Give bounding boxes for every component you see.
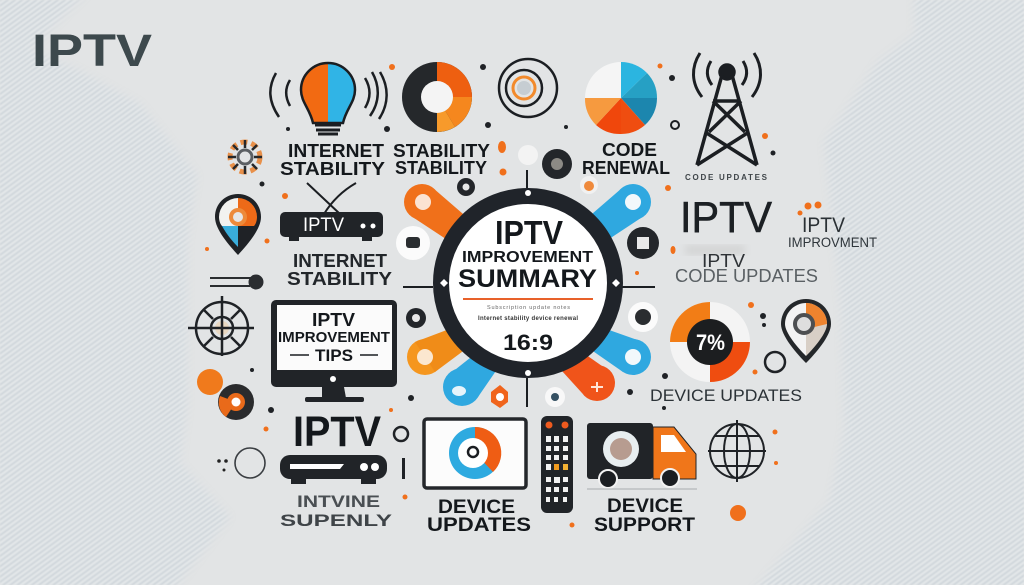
icon: delivery truck [587, 423, 697, 489]
icon: broadcast tower [693, 53, 761, 165]
icon: settings gear [228, 140, 262, 174]
text: code updates blurred: IPTV [702, 251, 745, 271]
text: device updates right: DEVICE UPDATES [650, 386, 802, 405]
logo: IPTV: IPTV [32, 25, 152, 76]
text: internet stability lower: INTERNET [293, 251, 387, 271]
text: code renewal: CODE [602, 140, 657, 160]
icon: small hexagon [394, 427, 408, 441]
icon: monitor with tips [271, 300, 397, 402]
text: stability stability: STABILITY [395, 158, 487, 178]
badges around the hub [396, 145, 659, 408]
text: blurred caption under tower: CODE UPDATES [685, 173, 768, 182]
paddle: red-orange lower right [552, 345, 615, 401]
hub: central summary circle: IMPROVEMENT [462, 249, 593, 266]
hub: central summary circle: SUMMARY [458, 265, 597, 293]
chart: colour pie [585, 62, 657, 134]
orange accents [205, 64, 822, 528]
icon: thin circle [217, 448, 265, 478]
icon: target rings [499, 59, 557, 117]
paddle: blue top right [585, 184, 651, 245]
text: device support: SUPPORT [594, 515, 695, 536]
text: code updates blurred: CODE UPDATES [675, 266, 818, 286]
chart: dark orange donut [402, 62, 472, 132]
icon: IPTV router [280, 212, 383, 241]
icon: monitor with tips: IPTV [312, 310, 355, 330]
text: garbled caption: SUPENLY [280, 511, 393, 530]
text: IPTV improvment [788, 214, 877, 250]
hub: central summary circle: IPTV [495, 214, 563, 251]
text: device support: DEVICE [607, 496, 683, 517]
icon: small donut [218, 384, 254, 420]
hub: central summary circle: 16:9 [503, 330, 553, 355]
text: internet stability lower [287, 251, 392, 289]
text: IPTV improvment: IMPROVMENT [788, 234, 877, 250]
icon: IPTV router: IPTV [303, 215, 344, 236]
text: code renewal [582, 140, 670, 178]
icon: small dark slider [210, 275, 263, 289]
dark accents [250, 64, 776, 479]
icon: monitor with tips: IMPROVEMENT [278, 329, 390, 346]
text: device support [594, 496, 695, 536]
icon: globe [708, 420, 766, 482]
icon: map pin left [215, 194, 261, 255]
heading: IPTV set-top box: IPTV [293, 408, 381, 456]
icon: light bulb [270, 63, 387, 134]
icon: small circle [765, 352, 785, 372]
text: garbled caption: INTVINE [297, 492, 380, 511]
text: device updates: DEVICE [438, 497, 515, 518]
text: device updates [427, 497, 531, 536]
text: stability stability [393, 141, 490, 178]
paddle: orange top left [404, 184, 470, 245]
hub: central summary circle: Internet stability device renewal [478, 316, 578, 322]
icon: small ring mark [671, 121, 679, 129]
icon: map pin right [781, 299, 831, 363]
text: internet stability lower: STABILITY [287, 269, 392, 289]
connectors from hub [403, 170, 655, 407]
icon: crosshair wheel [188, 296, 254, 356]
text: device updates: UPDATES [427, 515, 531, 536]
text: internet stability: STABILITY [280, 159, 385, 179]
icon: crossed antenna [307, 183, 356, 214]
paddle: orange lower left [407, 325, 478, 375]
text: internet stability [280, 141, 385, 179]
text: IPTV improvment: IPTV [802, 214, 845, 237]
hub: central summary circle [440, 190, 620, 376]
chart: 7 percent pie [670, 302, 750, 382]
icon: set-top box [280, 455, 387, 484]
text: internet stability: INTERNET [288, 141, 384, 161]
hub: central summary circle: Subscription update notes [487, 305, 570, 311]
icon: tablet donut [424, 419, 526, 488]
paddle: blue lower left [443, 350, 500, 406]
heading: IPTV right: IPTV [680, 193, 773, 242]
chart: 7 percent pie: 7% [696, 330, 725, 355]
text: stability stability: STABILITY [393, 141, 490, 161]
text: garbled caption [280, 492, 393, 530]
icon: orange dot [197, 369, 223, 395]
text: code renewal: RENEWAL [582, 158, 670, 178]
icon: monitor with tips: TIPS [315, 346, 353, 365]
text: code updates blurred [675, 245, 818, 286]
paddle: blue lower right [577, 325, 651, 375]
icon: remote control [541, 416, 573, 513]
